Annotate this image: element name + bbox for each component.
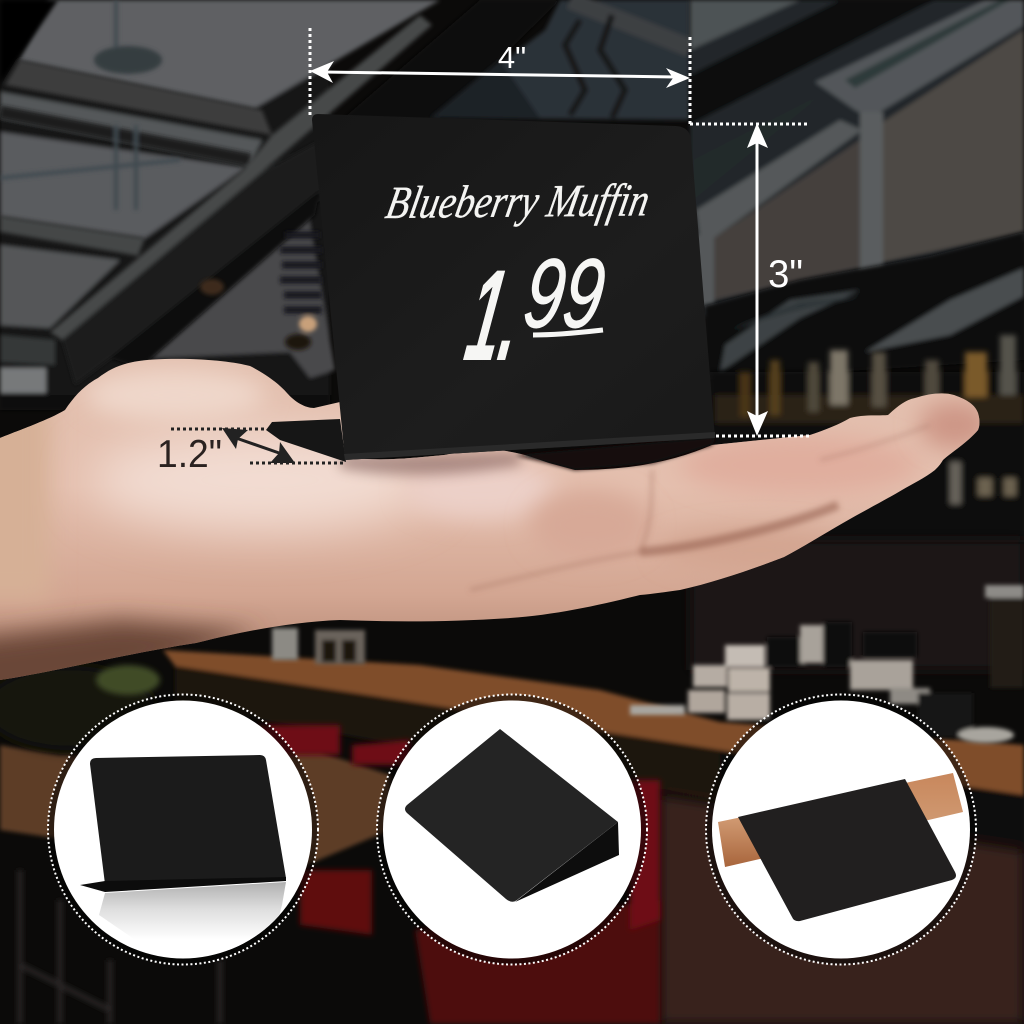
shelf of bottles [710,335,1024,542]
board [738,779,956,921]
sign board [312,114,715,460]
reflection [99,882,286,950]
board [90,755,286,884]
back wall of bar [690,540,1024,670]
bar crockery [272,585,1024,743]
dimension: height 3 inch [690,123,810,436]
dimension: depth 1.2 inch: 1.2" [157,433,222,476]
circle: sign on wooden peg [706,694,976,964]
bar counter [163,650,1024,1024]
board [405,729,618,902]
dimension: height 3 inch: 3" [768,253,803,296]
foreground table and chairs [0,665,660,1024]
palm creases [470,425,930,590]
foot [80,877,286,892]
price underline [533,330,603,335]
shadow under sign [340,452,520,475]
centre glass and chain [430,0,690,120]
dimension: depth 1.2 inch [157,428,343,476]
glass roof, left [0,0,440,410]
right windows [690,0,1024,320]
hand holding the sign [0,358,980,680]
sign: chalkboard with foot [266,114,715,462]
awning over bar [705,232,1024,380]
wrist shadow [0,605,256,680]
sign price: cents: 99 [518,238,611,348]
dimension: width 4 inch: 4" [498,40,526,75]
hanging lamps [200,235,322,350]
roof beams and frames [0,0,560,385]
sign foot [266,419,346,462]
circle: sign standing side view [48,694,318,964]
dimension: width 4 inch [310,28,690,124]
sign heading: Blueberry Muffin [382,176,654,229]
sign bottom fold [344,432,715,460]
sign price: dollars: 1. [457,242,533,388]
wooden peg [718,773,963,867]
dark gap under sign [515,437,716,470]
circle: sign angled view [377,694,647,964]
side fold [515,822,619,902]
